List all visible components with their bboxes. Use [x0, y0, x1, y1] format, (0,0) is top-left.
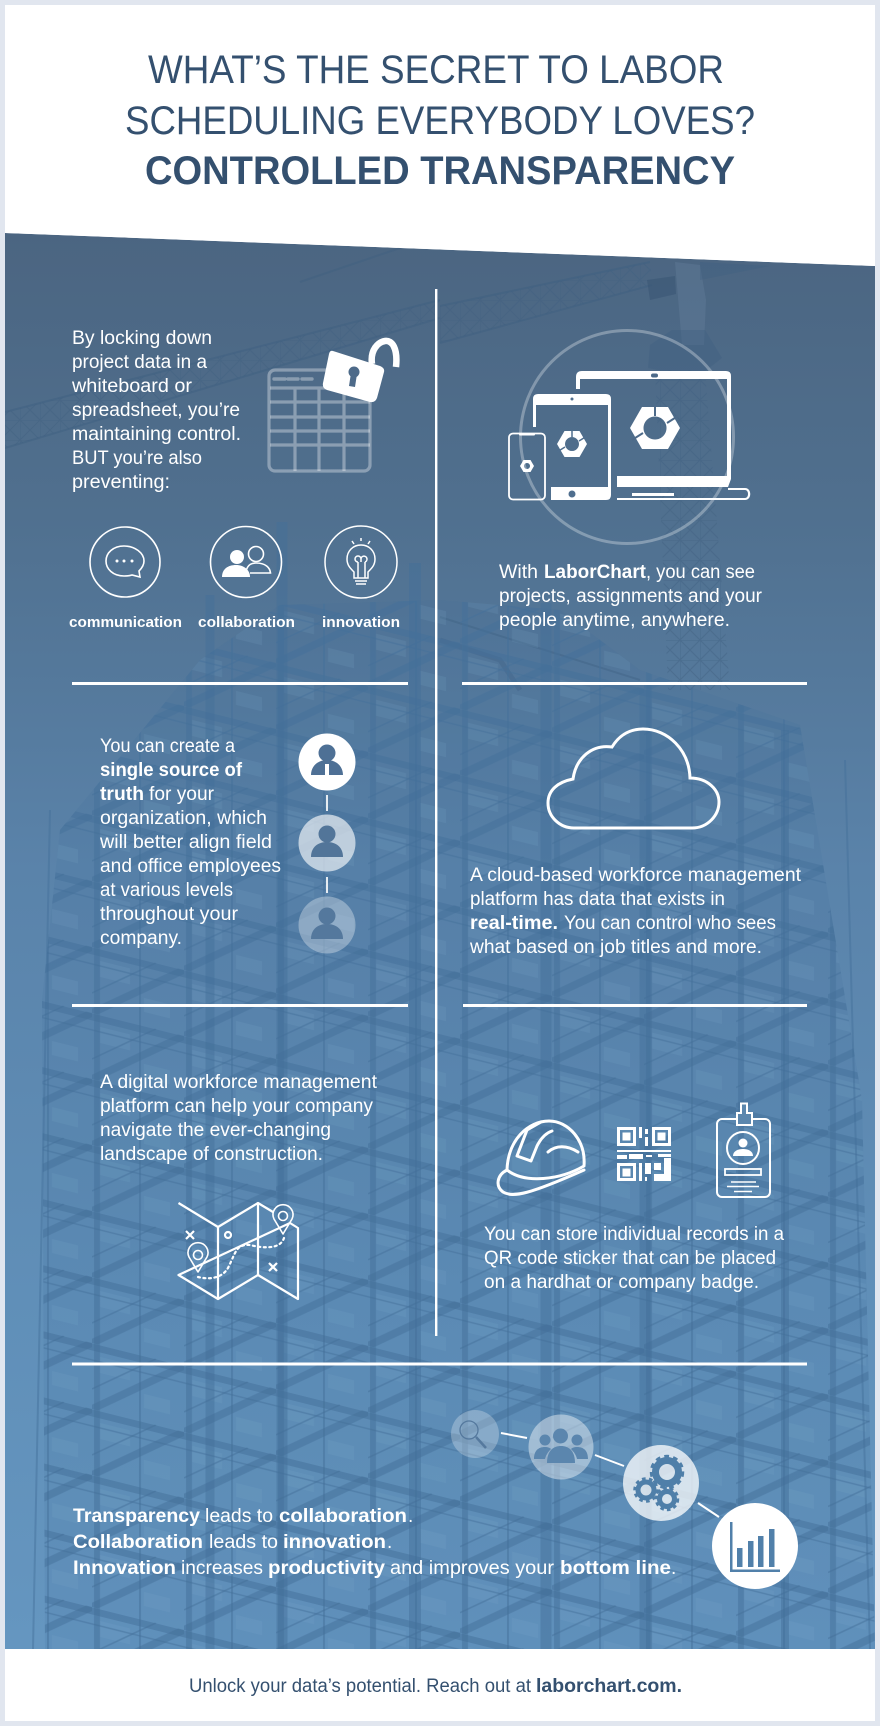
text: transparency summary: collaboration	[279, 1506, 407, 1527]
text: locking down: whiteboard or	[71, 376, 193, 397]
text: transparency summary: Transparency	[73, 1506, 200, 1527]
icon: team circle	[528, 1414, 594, 1480]
panel: single source of truth	[99, 734, 356, 954]
icon: collaboration	[210, 526, 282, 598]
icon: bottom person	[298, 896, 356, 954]
text: locking down: project data in a	[72, 352, 207, 373]
crane jibs	[5, 248, 652, 690]
text: transparency summary	[73, 1506, 676, 1579]
text: LaborChart: projects, assignments and your	[499, 586, 763, 607]
text: single source: organization, which	[100, 808, 267, 829]
text: single source: and office employees	[100, 856, 281, 877]
text: locking down	[71, 328, 241, 493]
label: communication: communication	[69, 614, 182, 631]
text: digital: navigate the ever-changing	[100, 1120, 331, 1141]
text: transparency summary: .	[408, 1506, 413, 1527]
text: single source: truth	[100, 784, 144, 805]
text: single source: company.	[100, 928, 182, 949]
text: single source	[99, 736, 281, 949]
text: LaborChart	[499, 562, 763, 631]
text: cloud: real-time.	[470, 913, 558, 934]
text: single source: at various levels	[100, 880, 233, 901]
text: digital: platform can help your company	[100, 1096, 373, 1117]
text: transparency summary: leads to	[209, 1532, 278, 1553]
icon: middle person	[298, 814, 356, 872]
text: QR code: on a hardhat or company badge.	[484, 1272, 759, 1293]
icon: search circle	[451, 1410, 499, 1458]
crane tower	[647, 262, 730, 690]
panel: LaborChart devices	[499, 330, 763, 631]
icon: cloud	[548, 729, 719, 828]
icon: gears circle	[623, 1445, 699, 1521]
text: cloud: A cloud-based workforce management	[470, 865, 802, 886]
panel: QR code records	[484, 1104, 784, 1293]
text: single source: throughout your	[100, 904, 239, 925]
text: transparency summary: bottom line	[560, 1558, 671, 1579]
icon: tablet	[533, 394, 611, 500]
text: transparency summary: Innovation	[73, 1558, 176, 1579]
icon: innovation	[325, 526, 397, 598]
title: WHAT’S THE SECRET TO LABOR	[148, 48, 724, 92]
panel: digital navigation	[100, 1072, 378, 1299]
text: locking down: By locking down	[72, 328, 212, 349]
text: single source: You can create a	[100, 736, 235, 757]
text: transparency summary: increases	[181, 1558, 263, 1579]
text: cloud: platform has data that exists in	[470, 889, 725, 910]
icon: ID badge	[717, 1104, 770, 1197]
text: LaborChart: , you can see	[646, 562, 755, 583]
text: transparency summary: innovation	[283, 1532, 386, 1553]
text: QR code: QR code sticker that can be placed	[484, 1248, 776, 1269]
text: transparency summary: .	[387, 1532, 392, 1553]
text: digital: A digital workforce management	[100, 1072, 378, 1093]
icon: ring	[520, 330, 734, 544]
panel: transparency chain	[73, 1410, 798, 1589]
icon: phone	[509, 433, 545, 500]
label: innovation: innovation	[322, 614, 400, 631]
icon: open padlock	[323, 341, 396, 402]
text: digital: landscape of construction.	[100, 1144, 323, 1165]
text: single source: will better align field	[99, 832, 272, 853]
text: LaborChart: people anytime, anywhere.	[499, 610, 730, 631]
panel: locking down data	[69, 328, 400, 631]
label: collaboration: collaboration	[198, 614, 295, 631]
text: LaborChart: LaborChart	[544, 562, 647, 583]
text: QR code	[484, 1224, 784, 1293]
icon: top person	[298, 734, 356, 790]
text: locking down: maintaining control.	[72, 424, 241, 445]
icon: laptop	[576, 371, 750, 500]
icon: spreadsheet	[269, 370, 370, 471]
icon: map	[178, 1203, 298, 1299]
title: CONTROLLED TRANSPARENCY	[145, 149, 735, 193]
title: SCHEDULING EVERYBODY LOVES?	[125, 99, 755, 143]
footer call to action: Unlock your data’s potential. Reach out at	[189, 1676, 532, 1697]
text: cloud	[469, 865, 802, 958]
text: digital	[100, 1072, 378, 1165]
text: transparency summary: productivity	[268, 1558, 385, 1579]
building steel frame	[33, 522, 875, 1649]
title	[125, 48, 755, 193]
text: cloud: You can control who sees	[564, 913, 776, 934]
text: transparency summary: leads to	[205, 1506, 273, 1527]
text: transparency summary: Collaboration	[73, 1532, 203, 1553]
divider lines	[72, 289, 807, 1366]
icon: hard hat	[498, 1121, 584, 1194]
text: transparency summary: and improves your	[390, 1558, 555, 1579]
text: cloud: what based on job titles and more.	[469, 937, 762, 958]
text: QR code: You can store individual records in a	[484, 1224, 784, 1245]
connector	[326, 877, 328, 893]
connector	[326, 795, 328, 811]
icon: bar chart circle	[712, 1503, 798, 1589]
text: transparency summary: .	[671, 1558, 676, 1579]
text: single source: for your	[149, 784, 215, 805]
text: single source: single source of	[100, 760, 243, 781]
panel: cloud platform	[469, 729, 802, 958]
icon: communication	[90, 527, 160, 597]
icon: QR code	[617, 1127, 671, 1181]
footer call to action: laborchart.com.	[536, 1676, 682, 1697]
arrows: connectors	[501, 1433, 719, 1517]
text: locking down: spreadsheet, you’re	[72, 400, 240, 421]
text: locking down: preventing:	[72, 472, 170, 493]
text: LaborChart: With	[499, 562, 538, 583]
text: locking down: BUT you’re also	[72, 448, 202, 469]
